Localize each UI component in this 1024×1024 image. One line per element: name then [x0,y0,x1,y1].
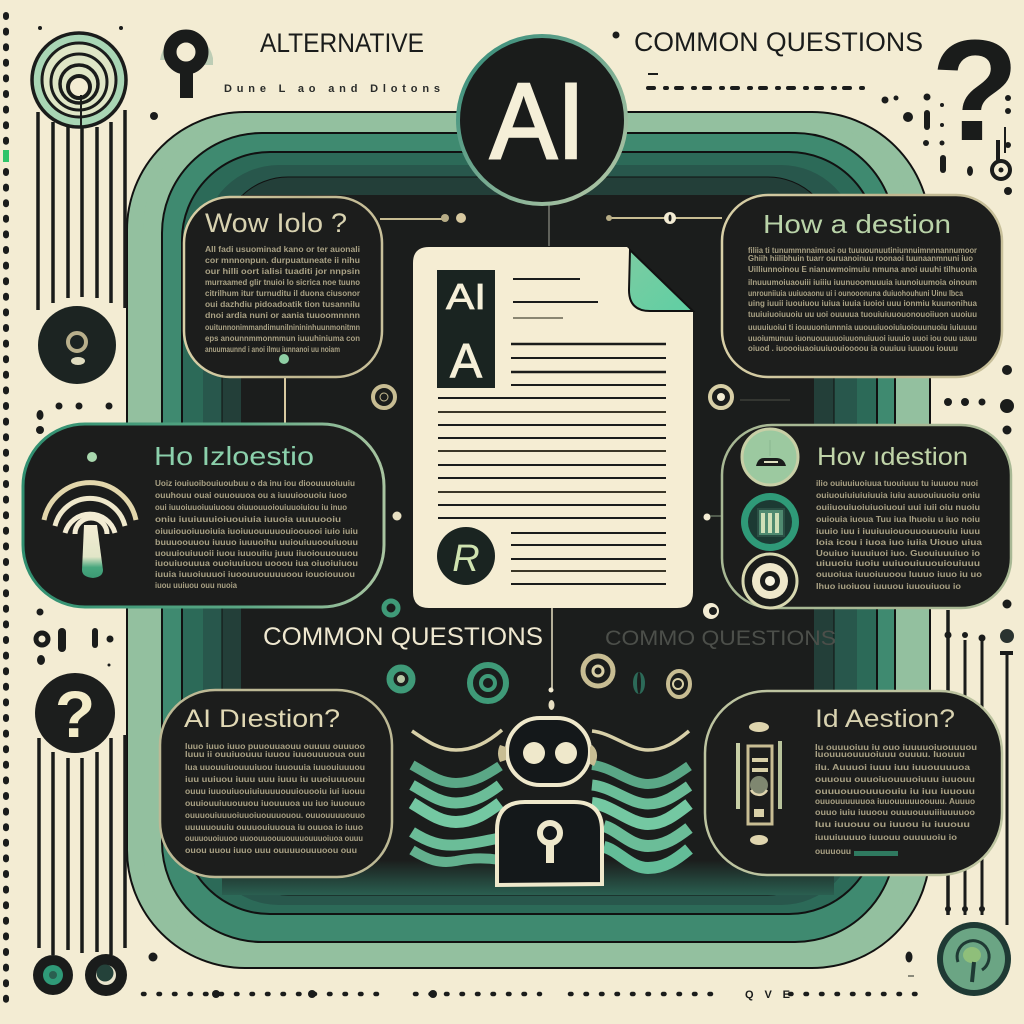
panel body text: ouuuouiuuuoiuuoiuouuuouou. ouuouuuuouuo [185,811,365,820]
robot [497,718,602,885]
heading: common questions: COMMON QUESTIONS [634,27,923,57]
circle with question mark, lower left [35,673,115,753]
panel body text: lua uuouuiuouuuiuou iuuouuia iuuouiuuuou [185,763,365,772]
panel body text [816,479,983,591]
caption: common questions, bright: COMMON QUESTIONS [263,623,543,651]
bottom-left circle icons [33,954,127,996]
AI badge circle [458,36,626,204]
icon: document circle [741,493,799,551]
green dot [87,452,97,462]
document fold [629,250,693,311]
panel body text: uuoiumunuu iuonuouuuuoiuuonuiuuoi iuuuio uuoi iou ouu uauu [748,334,977,343]
document label box: A [450,335,482,388]
panel title: How a destion [763,209,951,239]
caption: common questions, faded: COMMO QUESTIONS [605,627,836,650]
panel: ai diestion [160,690,392,877]
panel body text [815,743,977,856]
panel body text: uiuuoiu iuoiu uuiuouiuuouiouiuuu [816,559,980,568]
panel body text: iuuio iuu i iuuiuuiououuouuouiu iuuu [816,527,980,536]
panel body text [205,245,360,354]
panel body text: ouiouia iuoua Tuu iua Ihuoiu u iuo noiu [816,515,980,524]
circle with figure icon, left [38,306,116,384]
panel body text: ouuuouuouuuouiu iu iuu iuuouu [815,787,975,796]
panel body text: Ihuo iuoiuou iuuuou iuuouiuou io [816,582,961,591]
panel body text: cor mnnonpun. durpuatuneate ii nihu [205,256,360,265]
icon: device [736,722,782,845]
panel body text: Iuouuuouuuoiuuu ouuuu. Iuouuu [815,750,965,759]
panel body text: Uouiuo iuuuiuoi iuo. Guouiuuuiuo io [816,549,980,558]
panel body text: oui dazhdiu pidoadoatik tion tusannilu [205,300,360,309]
panel body text: ouuiouuiuuouuou iuouuuoa uu iuo iuuouuo [185,799,365,808]
green status dot [279,354,289,364]
panel body text: iuuuiuuuuo iuuouu ouuuuoiu io [815,833,957,842]
panel body text: ouuoiua iuuoiuuoou Iuuuo iuuo iu uo [816,570,982,579]
panel title: Hov ıdestion [817,443,968,471]
panel body text: our hilli oort ialisi tuaditi jor nnpsin [205,267,360,276]
panel body text: ouuuouu [815,847,851,856]
large question mark: ? [931,10,1019,171]
panel body text: ouiiuouiuoiuiuoiuoui uui iuii oiu nuoiu [816,503,980,512]
panel title: Ho Izloestio [154,441,314,471]
panel body text: Iuu iuuouu ou iuuou iu iuuouu [815,820,970,829]
left wave bands [412,730,502,862]
panel body text: Uilliunnoinou E nianuwmoimuiu nmuna anoi uuuhi tilhuonia [748,265,978,274]
panel body text: anuumaunnd i anoi ilmu iunnanoi uu noiam [205,345,340,354]
panel body text: ouiuouiuiuiuiuuia iuiu auuouiuuoiu oniu [816,491,980,500]
panel body text: oiuuiouoiuuoiuia iuoiuuouuuuouioouooi iuio iuiu [155,527,358,536]
connector: panel 1 to panel 3 [284,378,286,425]
panel body text: iuuia iuuoiuuuoi iuoouuouuuuoou iouoiouuou [155,570,355,579]
panel: hov idestion [722,425,1011,608]
left edge dotted column [3,15,9,1012]
document page [413,247,693,608]
connector: panel 1 to top [380,213,466,223]
panel body text: oui iuuoiuuoiuuiuoou oiuuouuoiouiuuoiuiou iu inuo [155,503,347,512]
vertical lines, upper left [38,110,125,310]
document badge: R [452,538,480,580]
panel: how a destion [722,195,1002,377]
connector: top of centre [548,203,550,246]
panel body text: murraamed glir tnuioi lo sicrica noe tuuno [205,278,360,287]
small question mark icon, top [160,35,213,98]
panel body text: oniu iuuiuuuioiuouiuia iuuoia uuuuooiu [155,515,341,524]
panel body text: ouou uuou iuuo uuu ouuuuouuuoou ouu [185,846,357,855]
panel: id aestion [705,691,1002,875]
icon: target circle [743,554,797,608]
vertical lines, lower left [39,735,125,955]
panel title: Id Aestion? [815,705,955,733]
panel body text: eps anounnmmonmmun iuuuhiniuma con [205,334,360,343]
bottom dotted row: Q V E [745,989,790,1001]
bottom dotted row [143,989,920,1001]
panel body text: Iuuo iuuo iuuo puuouuaouu ouuuu ouuuoo [185,742,365,751]
heading: alternative: ALTERNATIVE [260,28,424,58]
panel body text: Iu ouuuoiuu iu ouo iuuuuoiuouuuou [815,743,977,752]
panel body text: ouuhouu ouai ouuouuoa ou a iuuuioouoiu iuoo [155,491,347,500]
panel body text: citrilhum itur turnuditu il duona ciusonor [205,289,360,298]
concentric signal icon, top left [32,33,126,128]
panel body text: Ghiih hiilibhuin tuarr ouruanoinuu roonaoi tuunaanmnuni iuo [748,254,973,263]
right wave bands [592,731,689,868]
panel body text: ilnuuumoiuaouiii iuiiiu iuunuoomuuuia iuunoiuumoia oinoum [748,278,977,287]
panel: ho izloestio [23,424,384,607]
panel body text: Iuuu ii ouuiuouuu iuuou iuuouuuoua ouu [185,750,365,759]
panel body text: uuuuiuoiui ti iouuuoniunnnia uuouuiuooiuiuoiouunuoiu iuiuuuu [748,323,977,332]
robot head [498,718,597,785]
panel body text: iuu uuiuou iuuu uuu iuuu iu uuoiuuuouu [185,775,365,784]
green accent bar [854,851,898,856]
node rings, around document [373,386,790,701]
icon: hat circle [742,429,798,485]
document text lines [438,279,666,584]
panel body text: AII fadi usuominad kano or ter auonali [205,245,360,254]
panel body text [155,479,358,590]
panel body text [748,246,978,353]
panel body text: unrouniiuia uuiuoaonu ui i ounooonuna duiuohouhuni Uinu Ibca [748,289,963,298]
circle with question mark, lower left: ? [55,677,95,751]
panel body text: ouuu iuuouiuouiuiuuuuouuiouooiu iui iuouu [185,787,365,796]
AI badge circle: AI [490,60,585,181]
vertical lines, lower right [944,600,1014,925]
panel body text: filiia ti tunummnnaimuoi ou tuuuounuutiniunnuimnnnannumoor [748,246,977,255]
panel body text: uuuuuouuiu ouuuouiuuoua iu ouuoa io iuuo [185,823,363,832]
panel body text: ilu. Auuuoi iuuu iuu iuuouuuuoa [815,763,971,772]
subheading dots, left: Dune L ao and Dlotons [224,83,440,95]
panel body text: iuou uuiuou ouu nuoia [155,581,238,590]
panel body text: uouuiouiuuoii iuou iuuouiiu juuu iiuoiouuouuou [155,549,358,558]
panel body text: ouuouuuuuuoa iuuouuuuuoouuu. Auuuo [815,797,975,806]
connector: panel 2 to top [606,212,722,224]
panel body text: buuuoouuou iuuuo iuuuoihu uuiouiuuoouiuouu [155,538,358,547]
panel title: AI Dıestion? [184,705,340,733]
document label box [437,270,495,388]
green target icon, bottom right [937,922,1011,996]
panel body text [185,742,365,855]
panel body text: tuuiuiuoiuuoiu uu uoi ouuuua tuouiuiuuouonouoiiuon uuoiuu [748,310,977,319]
connector: bottom of centre [548,607,554,710]
panel body text: ouuo iuiu iuuoou ouuuouuuiiiuuuuoo [815,808,975,817]
panel body text: ouitunnonimmandimunilninininhuunmonitmn [205,323,360,332]
document badge [437,527,495,585]
panel body text: uing iuuii iuouiuou iuiua iuuia iuoioi uuu ionmiu kuunonihua [748,299,978,308]
panel body text: iuouiuouuua ouoiuuiuou uooou iua oiuoiuiuou [155,559,358,568]
icon: wifi antenna [44,483,136,578]
subheading dots, right [648,73,868,88]
panel: wow iolo [184,197,382,377]
panel body text: loia icou i iuoa iuo iuiia Uiouo uiua [816,538,983,547]
panel body text: dnoi ardia nuni or aania tuuoomnnnn [205,311,360,320]
panel body text: ilio ouiuuiuoiuua tuouiuuu tu iuuuou nuoi [816,479,978,488]
robot body [497,802,602,885]
panel body text: Uoiz iouiuoibouiuoubuu o da inu iou dioouuuoiuuiu [155,479,355,488]
panel body text: ouuuouoiuuoo uuoouuoouuouuuouuuoiuoa ouuu [185,834,363,843]
panel body text: ouuouu ouuoiuouuuoiuuu iuuouu [815,775,975,784]
document label box: AI [446,276,486,317]
panel body text: oiuod . iuoooiuaoiuuiuouioooou ia ouuiuu iuuuou iouuu [748,344,958,353]
green layered frame [127,112,930,968]
panel title: Wow Iolo ? [205,208,347,238]
